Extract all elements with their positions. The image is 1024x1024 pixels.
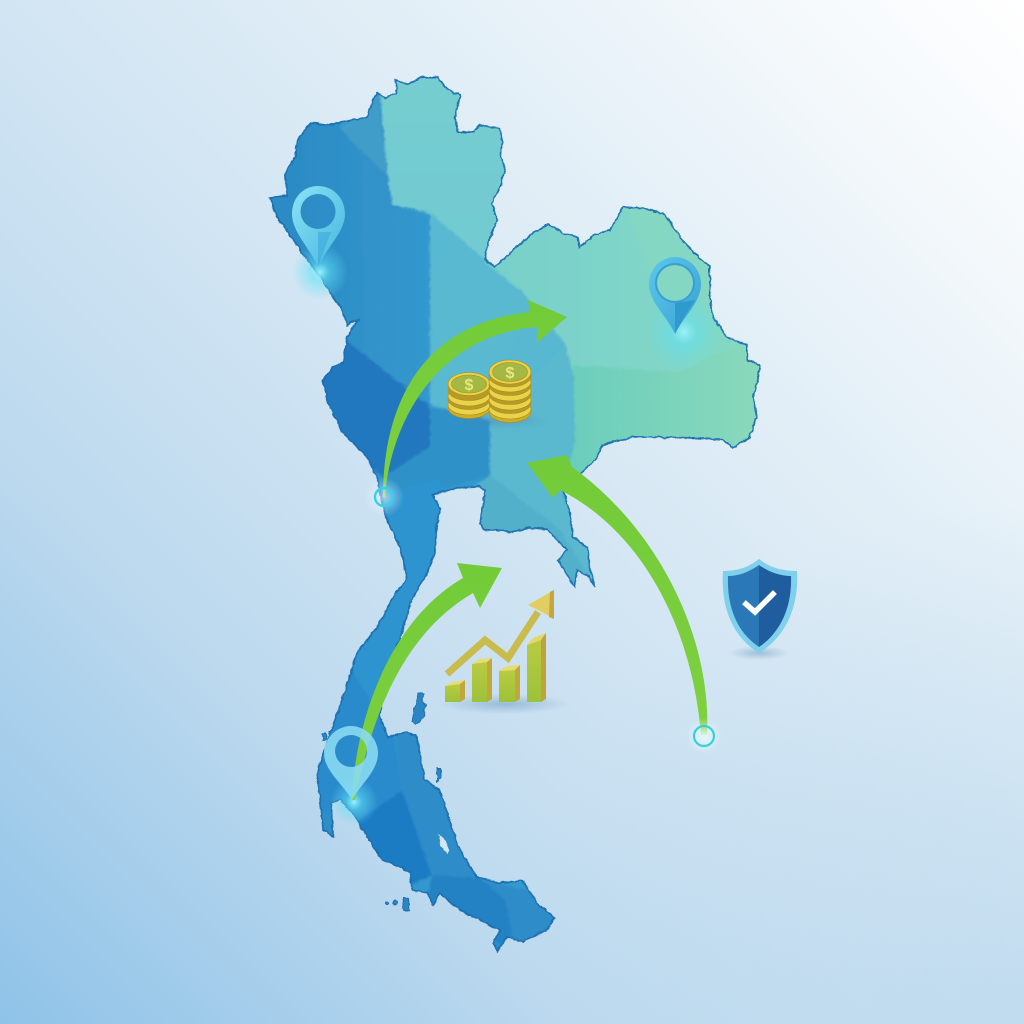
right coin dollar sign: $ xyxy=(506,365,515,382)
location pin: north-east xyxy=(649,257,701,334)
start marker: sea xyxy=(686,718,722,754)
location pin: north-west xyxy=(292,186,345,267)
pin glow: north-west xyxy=(292,244,348,300)
icon: coin stacks xyxy=(446,360,550,430)
map edge xyxy=(270,77,760,952)
left coin dollar sign: $ xyxy=(465,377,474,394)
chart shadow xyxy=(439,694,571,714)
green arrow: south upward xyxy=(352,563,502,800)
coin shadow xyxy=(446,412,550,430)
bar 1 xyxy=(445,680,465,702)
shield face dark half xyxy=(759,565,791,647)
shield shadow xyxy=(729,646,789,660)
islands xyxy=(322,693,441,911)
shield face xyxy=(728,565,759,647)
pin glow: south xyxy=(330,778,378,826)
green arrow: sea to centre xyxy=(527,455,707,735)
lake xyxy=(438,834,449,854)
map facets xyxy=(271,76,760,950)
start marker: west coast xyxy=(364,477,404,517)
map outline xyxy=(270,77,760,952)
map of Thailand xyxy=(268,76,761,954)
green arrow: west coast to centre xyxy=(383,300,567,497)
trend arrow xyxy=(447,590,554,674)
left coin stack xyxy=(448,372,490,418)
icon: security shield xyxy=(723,559,797,660)
check mark xyxy=(746,594,773,612)
bar 2 xyxy=(472,658,492,702)
right coin stack xyxy=(489,360,531,422)
bar 3 xyxy=(499,665,520,702)
pin glow: north-east xyxy=(646,294,722,370)
shield rim xyxy=(723,559,797,653)
bar 4 xyxy=(527,633,546,702)
icon: growth chart xyxy=(439,590,571,714)
location pin: south xyxy=(324,726,378,800)
